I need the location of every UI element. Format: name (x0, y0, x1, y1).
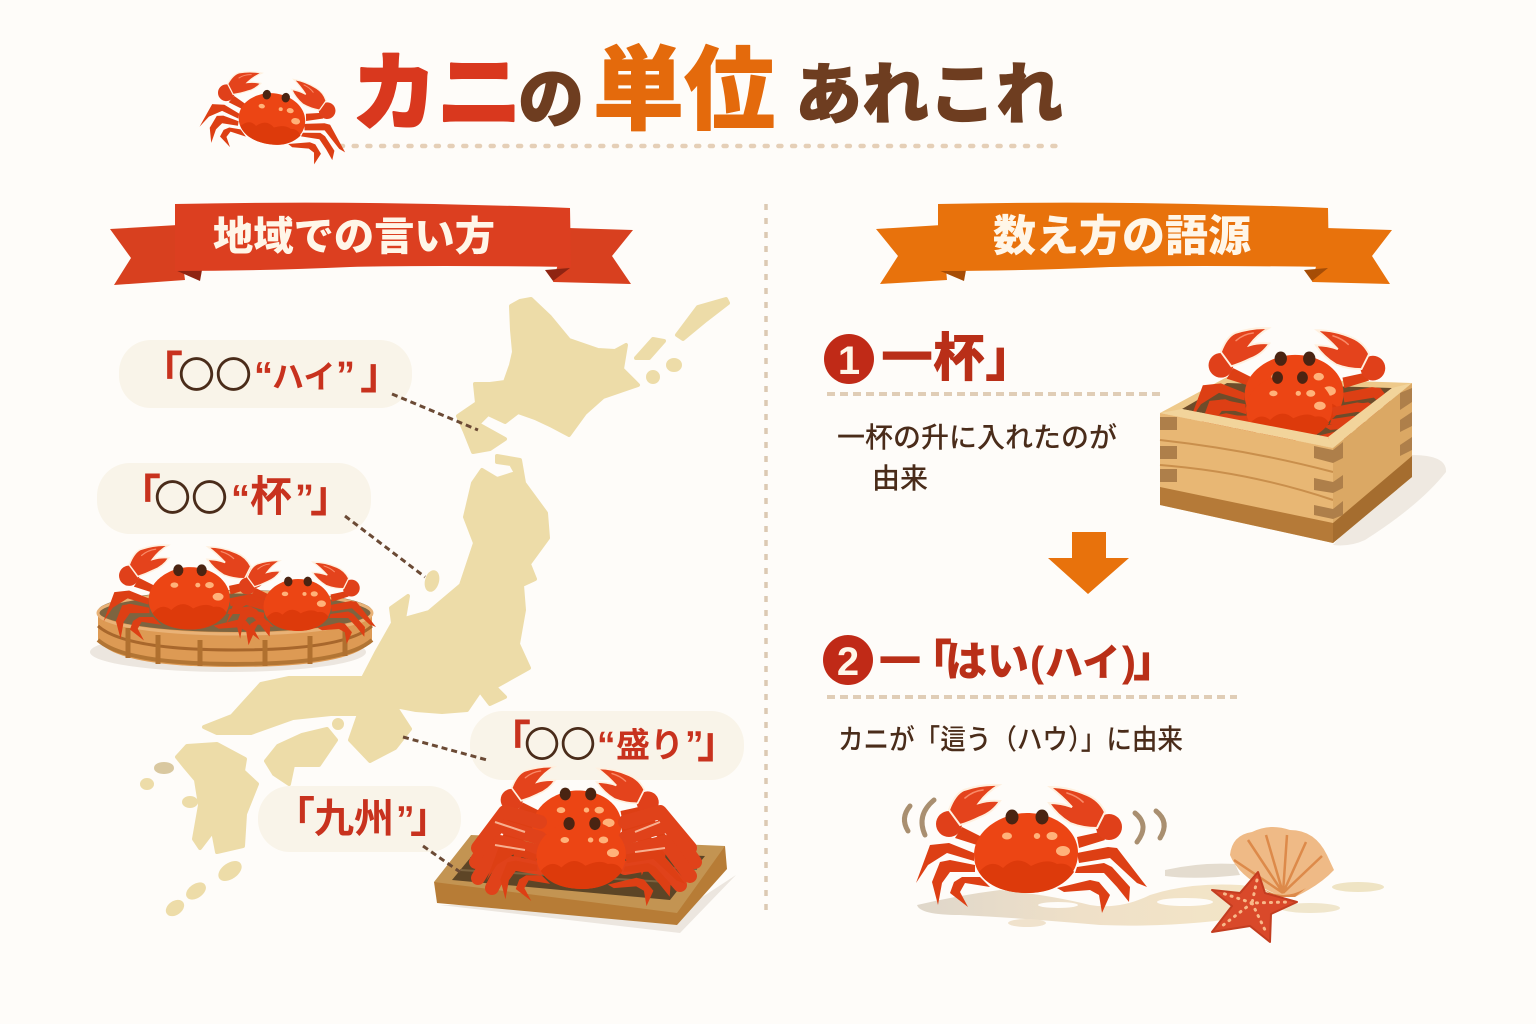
callout: hai: 〇〇 (178, 355, 252, 396)
front crab (487, 817, 685, 906)
section 1 text: 由来 (872, 463, 928, 494)
scallop shell (1230, 827, 1334, 897)
callout: mori: 」 (697, 718, 741, 767)
round wooden tray with crabs (90, 545, 376, 672)
callout: hai kanji: 杯 (250, 473, 292, 520)
callout: hai: “ (254, 355, 273, 397)
title text (352, 41, 1063, 142)
callout: hai kanji: 「 (117, 472, 161, 521)
callout: mori: 盛り (616, 727, 684, 765)
callout: hai: ハイ (272, 359, 335, 395)
callout: kyushu: ” (396, 799, 414, 840)
title text: 単位 (593, 41, 775, 142)
callout: hai: ” (336, 355, 355, 397)
box right face (1333, 383, 1412, 543)
front crab (1198, 371, 1390, 457)
wooden tray with pile of crabs (434, 767, 736, 933)
box rim (1160, 409, 1333, 448)
title text: カニ (352, 47, 522, 142)
callout: mori: ” (685, 724, 704, 765)
back crab (1190, 328, 1409, 450)
banner text: 数え方の語源 (993, 213, 1251, 261)
Hokkaido (458, 299, 638, 452)
starfish (1212, 872, 1297, 942)
callout: hai kanji (97, 463, 371, 534)
callout: hai kanji: 〇〇 (154, 478, 228, 519)
number badge 1 (824, 334, 874, 384)
section 2 heading: 「 (908, 637, 952, 686)
callout: hai kanji: 」 (310, 472, 354, 521)
callout: hai: 「 (139, 349, 183, 398)
section 2 heading: ハイ (1045, 643, 1120, 685)
section 2 heading (823, 635, 1177, 686)
Shikoku (266, 729, 336, 784)
arrow down (1048, 532, 1129, 594)
callout: mori: 〇〇 (524, 724, 596, 765)
section 1 heading: 1 (838, 339, 860, 383)
section 1 text: 一杯の升に入れたのが (837, 422, 1117, 453)
center divider (764, 204, 768, 918)
section 2 heading: 一 (879, 638, 921, 685)
title block (197, 41, 1064, 169)
back crab (484, 767, 680, 876)
callout: kyushu (258, 786, 461, 852)
callout: hai: 」 (360, 349, 404, 398)
title crab icon (197, 65, 355, 169)
number badge 2 (823, 635, 873, 685)
wooden masu box with crabs (1160, 328, 1446, 545)
callout: kyushu: 九州 (314, 797, 394, 841)
crab (916, 785, 1147, 913)
sand (917, 884, 1280, 926)
callout: hai kanji: ” (295, 478, 314, 520)
callout: mori: “ (597, 724, 616, 765)
box left face (1160, 413, 1333, 543)
title text: の (518, 62, 584, 136)
crab large (103, 545, 284, 645)
section 2 heading: はい (945, 638, 1029, 685)
section 1 heading: 一杯」 (881, 330, 1037, 388)
callout: kyushu: 」 (410, 794, 452, 841)
title underline (340, 144, 1064, 148)
section 2 heading: ) (1122, 638, 1136, 685)
map of Japan (142, 299, 728, 917)
callout: hai (119, 340, 412, 408)
Honshu (204, 456, 548, 761)
callout: mori (470, 711, 744, 780)
islands (677, 299, 728, 339)
callout: mori: 「 (487, 718, 531, 767)
callout: kyushu: 「 (273, 794, 315, 841)
section 2 text: カニが「這う（ハウ）」に由来 (838, 724, 1183, 755)
banner: etymology (876, 203, 1392, 284)
motion marks (904, 800, 1164, 842)
leader lines (345, 394, 487, 872)
section 2 heading: 」 (1133, 637, 1177, 686)
Kyushu (177, 744, 257, 852)
banner: regional names (110, 203, 633, 285)
section 2 heading: ( (1030, 638, 1044, 685)
callout: hai kanji: “ (231, 478, 250, 520)
crab small (226, 561, 376, 644)
section 2 heading: 2 (837, 640, 859, 684)
beach scene (904, 785, 1384, 942)
banner text: 地域での言い方 (213, 215, 495, 259)
title text: あれこれ (795, 58, 1063, 133)
